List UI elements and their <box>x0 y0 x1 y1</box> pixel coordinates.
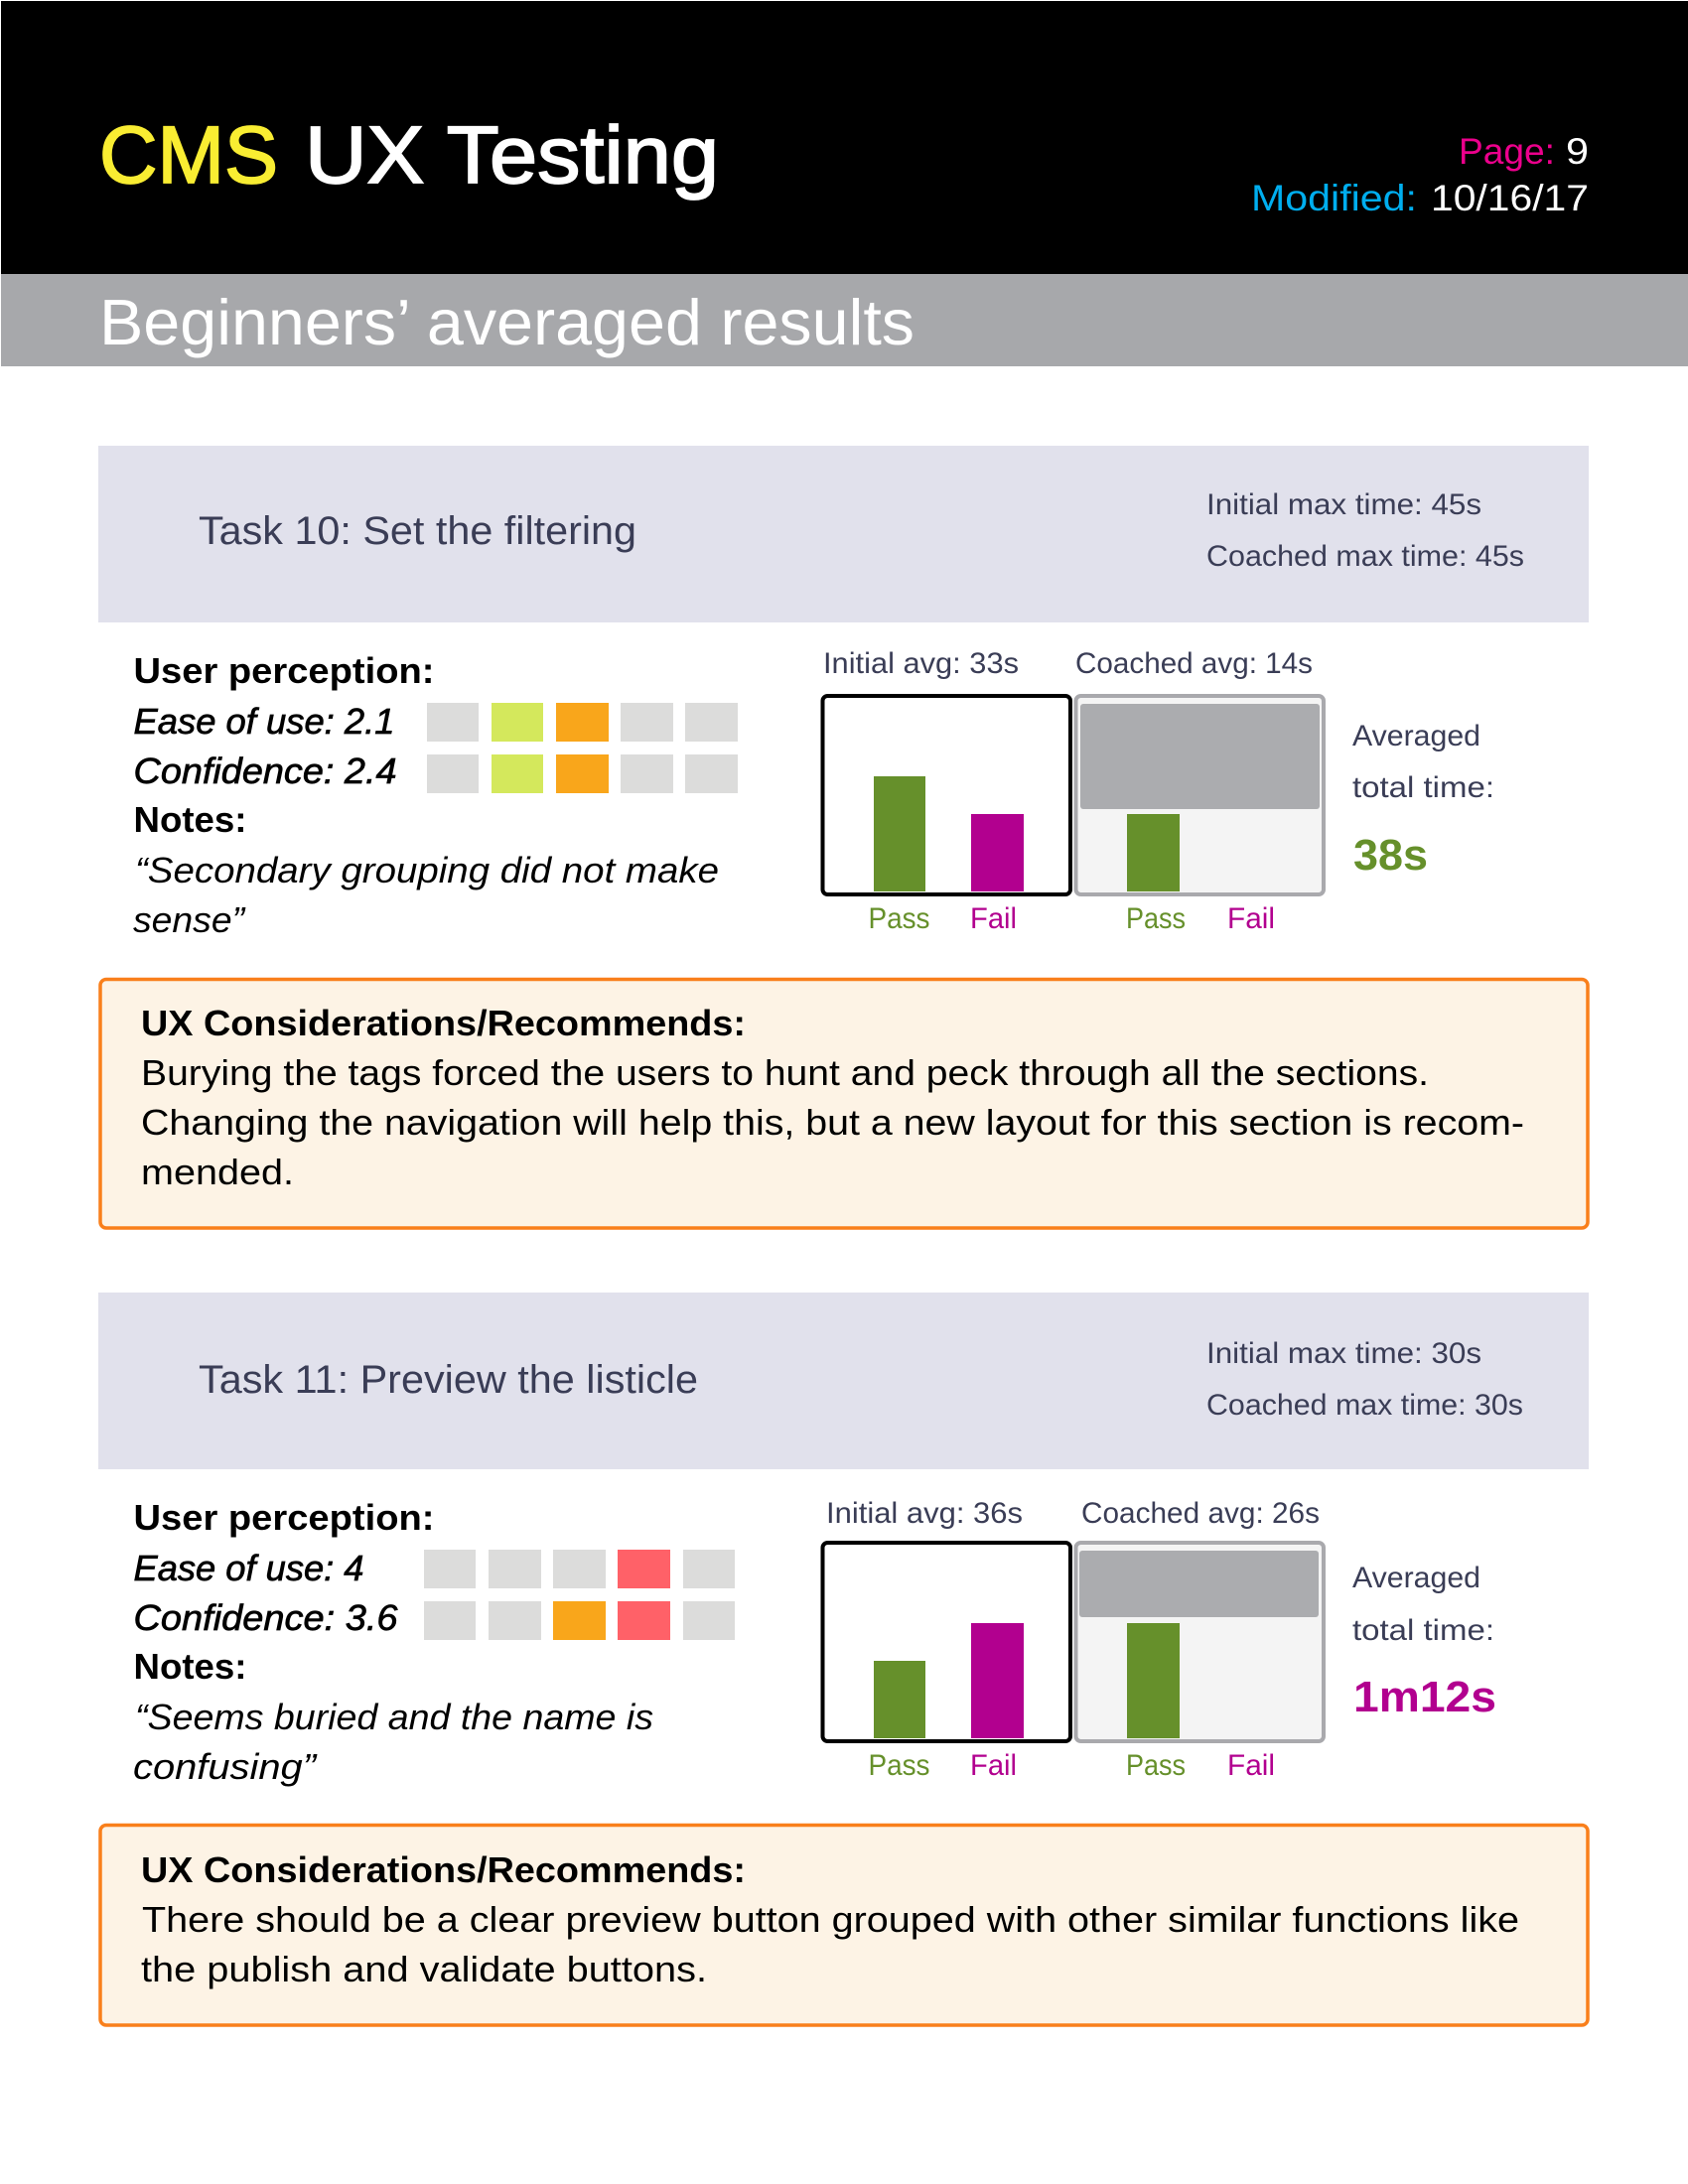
subtitle band: Beginners’ averaged results <box>99 286 914 358</box>
bar chart: task 10 times: Pass <box>868 902 929 935</box>
callout: task 10 recommendations <box>100 979 1588 1228</box>
task 10 max times: Initial max time: 45s <box>1206 488 1481 521</box>
panel: task 10 header <box>98 446 1589 622</box>
panel: task 11 user perception: confusing” <box>133 1746 318 1787</box>
subtitle band <box>1 274 1688 366</box>
bar chart: task 11 times: Fail <box>1227 1749 1275 1782</box>
modified date <box>1251 178 1589 218</box>
rating: ease of use <box>427 703 738 742</box>
panel: task 10 user perception: User perception: <box>133 650 435 691</box>
callout: task 10 recommendations: UX Considerations/Recommends: <box>141 1003 746 1043</box>
rating: ease of use <box>424 1550 735 1588</box>
title: UX Testing <box>305 110 719 201</box>
bar chart: task 11 times <box>822 1497 1324 1782</box>
panel: task 11 user perception: “Seems buried and the name is <box>135 1697 653 1737</box>
task 10 title: Task 10: Set the filtering <box>199 509 636 553</box>
callout: task 11 recommendations: There should be a clear preview button grouped with other similar functions like <box>142 1899 1519 1940</box>
bar chart: task 11 times: Coached avg: 26s <box>1081 1497 1320 1530</box>
task 11 averaged total time <box>1352 1562 1496 1721</box>
page number: Page: <box>1459 131 1555 172</box>
task 11 averaged total time: Averaged <box>1352 1562 1480 1594</box>
panel: task 10 user perception: Notes: <box>133 799 246 840</box>
bar chart: task 10 times: Fail <box>1227 902 1275 935</box>
task 11 averaged total time: 1m12s <box>1353 1673 1496 1721</box>
page number: 9 <box>1566 131 1589 172</box>
callout: task 11 recommendations: UX Considerations/Recommends: <box>141 1849 746 1890</box>
modified date: Modified: <box>1251 178 1417 218</box>
callout: task 11 recommendations <box>100 1825 1588 2025</box>
panel: task 11 user perception: Ease of use: 4 <box>133 1548 363 1588</box>
callout: task 10 recommendations: Burying the tags forced the users to hunt and peck through all the sections. <box>141 1052 1429 1093</box>
bar chart: task 11 times: Initial avg: 36s <box>826 1497 1023 1530</box>
panel: task 11 user perception: Notes: <box>133 1646 246 1687</box>
task 10 averaged total time <box>1352 720 1494 880</box>
header banner <box>1 1 1688 274</box>
bar chart: task 11 times: Pass <box>1126 1749 1186 1782</box>
callout: task 11 recommendations: the publish and validate buttons. <box>141 1949 707 1989</box>
bar chart: task 11 times: Pass <box>868 1749 929 1782</box>
panel: task 11 user perception: Confidence: 3.6 <box>133 1597 399 1638</box>
rating: confidence <box>424 1601 735 1640</box>
panel: task 10 user perception: Confidence: 2.4 <box>133 751 397 791</box>
rating: confidence <box>427 754 738 793</box>
bar chart: task 10 times: Initial avg: 33s <box>823 647 1019 680</box>
bar chart: task 11 times: Fail <box>970 1749 1017 1782</box>
task 10 averaged total time: total time: <box>1352 771 1494 804</box>
task 10 averaged total time: 38s <box>1353 831 1428 880</box>
panel: task 10 user perception: Ease of use: 2.1 <box>133 701 395 742</box>
title: CMS <box>99 110 278 201</box>
panel: task 10 user perception: “Secondary grouping did not make <box>135 850 719 890</box>
task 11 averaged total time: total time: <box>1352 1614 1494 1647</box>
bar chart: task 10 times: Pass <box>1126 902 1186 935</box>
task 10 max times <box>1206 488 1524 573</box>
task 11 max times: Coached max time: 30s <box>1206 1389 1523 1422</box>
callout: task 10 recommendations: Changing the navigation will help this, but a new layout for this section is recom- <box>141 1102 1524 1143</box>
panel: task 11 user perception: User perception: <box>133 1497 435 1538</box>
task 10 max times: Coached max time: 45s <box>1206 540 1524 573</box>
modified date: 10/16/17 <box>1431 178 1589 218</box>
panel: task 11 header <box>98 1293 1589 1469</box>
panel: task 10 user perception <box>133 650 738 940</box>
panel: task 11 user perception <box>133 1497 735 1787</box>
task 11 title: Task 11: Preview the listicle <box>199 1358 698 1402</box>
task 10 averaged total time: Averaged <box>1352 720 1480 752</box>
bar chart: task 10 times: Fail <box>970 902 1017 935</box>
title <box>99 110 719 201</box>
bar chart: task 10 times <box>822 647 1324 935</box>
task 11 max times <box>1206 1337 1523 1422</box>
callout: task 10 recommendations: mended. <box>141 1152 294 1192</box>
panel: task 10 user perception: sense” <box>133 899 246 940</box>
bar chart: task 10 times: Coached avg: 14s <box>1075 647 1313 680</box>
task 11 max times: Initial max time: 30s <box>1206 1337 1481 1370</box>
